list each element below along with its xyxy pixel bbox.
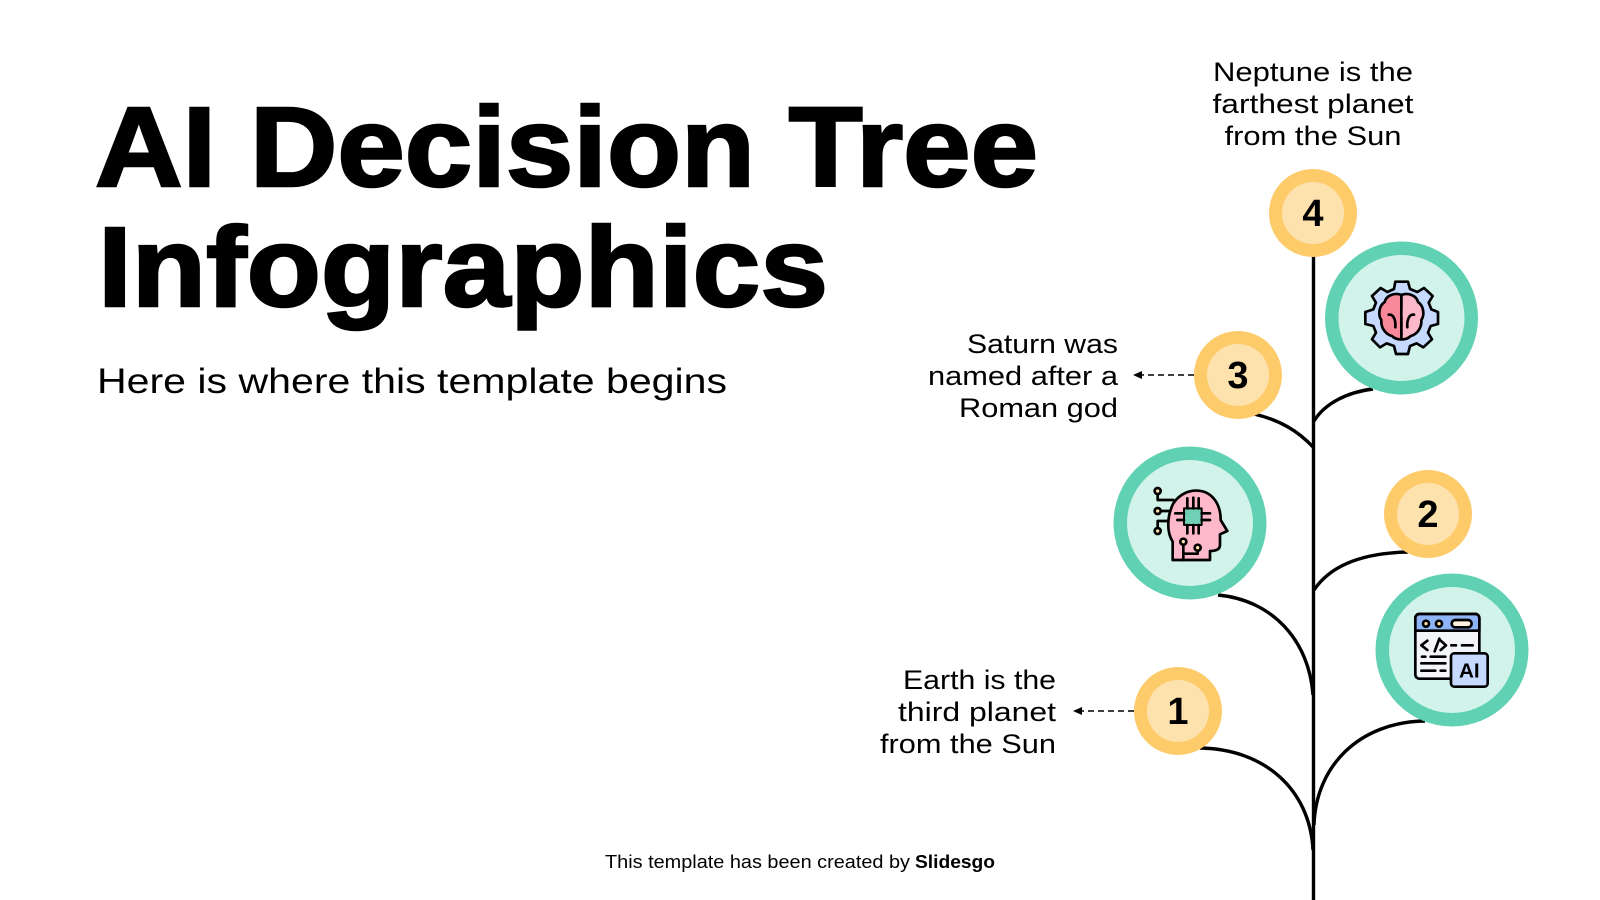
step 1 badge: 1 [1167, 691, 1189, 733]
icon: AI code window [1376, 574, 1528, 726]
tree trunk and branches [1200, 255, 1425, 900]
icon: AI code window: AI [1459, 659, 1480, 682]
step 4 description: from the Sun [1224, 121, 1402, 151]
footer credit: Slidesgo [915, 852, 995, 872]
footer credit: This template has been created by [605, 852, 910, 872]
step 2 badge: 2 [1417, 494, 1439, 536]
step 1 description: from the Sun [880, 729, 1056, 759]
step 4 description: Neptune is the [1213, 57, 1413, 87]
step 3 badge [1194, 331, 1282, 419]
step 3 description: Saturn was [967, 329, 1118, 359]
step 1 description: third planet [898, 697, 1057, 727]
step 4 description [1212, 57, 1414, 151]
step 4 badge: 4 [1302, 193, 1324, 235]
title: Infographics [98, 204, 828, 330]
arrow from step 3 to text [1133, 371, 1194, 379]
step 4 description: farthest planet [1212, 89, 1414, 119]
title [95, 84, 1038, 330]
step 3 badge: 3 [1227, 355, 1249, 397]
icon: AI head [1114, 446, 1266, 600]
icon: brain gear [1325, 242, 1478, 394]
subtitle: Here is where this template begins [97, 362, 727, 401]
step 3 description [928, 329, 1119, 423]
step 2 badge [1384, 470, 1472, 558]
step 3 description: Roman god [959, 393, 1118, 423]
step 1 description [880, 665, 1057, 759]
arrow from step 1 to text [1073, 707, 1134, 715]
step 4 badge [1269, 169, 1357, 257]
step 1 description: Earth is the [903, 665, 1056, 695]
step 1 badge [1134, 667, 1222, 755]
step 3 description: named after a [928, 361, 1119, 391]
title: AI Decision Tree [95, 84, 1038, 210]
